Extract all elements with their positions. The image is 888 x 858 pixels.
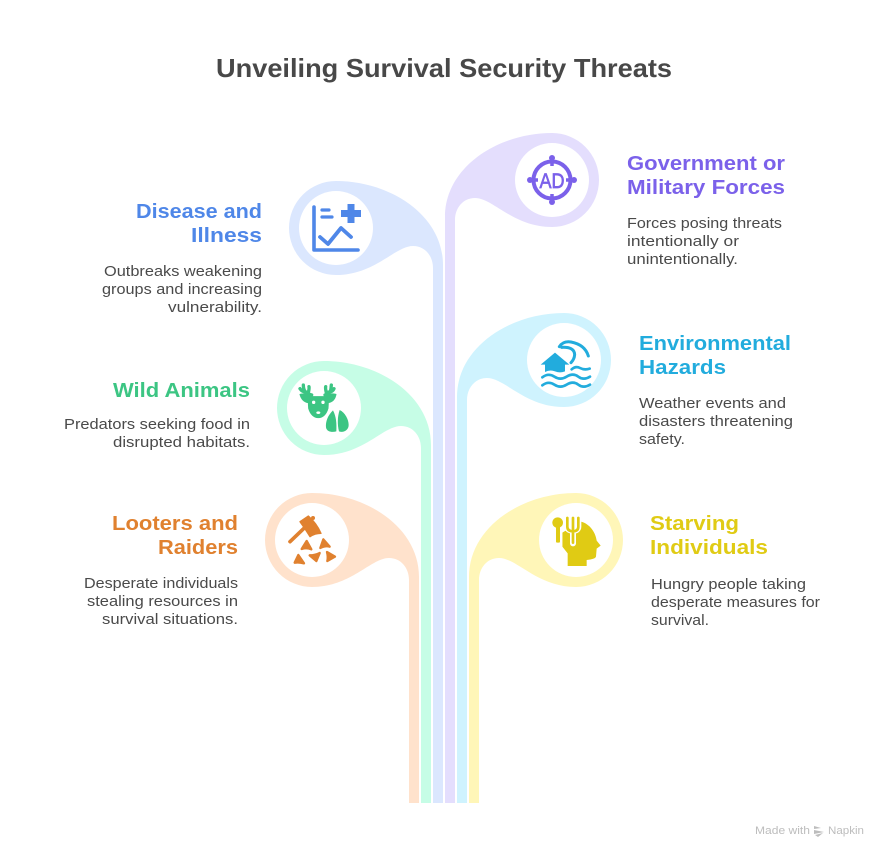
panel: looters and raiders stem: [265, 493, 419, 803]
text block: government or military forces: Forces posing threats: [627, 216, 782, 232]
text block: environmental hazards: Hazards: [639, 357, 726, 379]
text block: disease and illness: Illness: [191, 225, 262, 247]
attribution: made with napkin: [755, 825, 864, 837]
text block: looters and raiders: Desperate individuals: [84, 576, 238, 592]
text block: government or military forces: Government or: [627, 153, 785, 175]
text block: environmental hazards: disasters threatening: [639, 414, 793, 430]
text block: starving individuals: Starving: [650, 513, 739, 535]
text block: wild animals: [64, 380, 250, 451]
panel: disease and illness stem: [289, 181, 443, 803]
text block: disease and illness: Outbreaks weakening: [104, 264, 262, 280]
icon: head with spoon and fork: [552, 517, 601, 566]
panel: wild animals stem: [277, 361, 431, 803]
icon: target with AD: [527, 155, 577, 205]
text block: environmental hazards: safety.: [639, 432, 685, 448]
text block: environmental hazards: Environmental: [639, 333, 791, 355]
text block: disease and illness: vulnerability.: [168, 300, 262, 316]
panel: government or military stem: [445, 133, 599, 803]
text block: starving individuals: Individuals: [650, 537, 768, 559]
text block: government or military forces: intentionally or: [627, 234, 739, 250]
text block: government or military forces: unintentionally.: [627, 252, 738, 268]
icon: deer head and hoofprint: [300, 385, 349, 432]
text block: starving individuals: desperate measures for: [651, 595, 820, 611]
attribution: made with napkin: Made with: [755, 825, 810, 837]
text block: wild animals: disrupted habitats.: [113, 435, 250, 451]
text block: disease and illness: Disease and: [136, 201, 262, 223]
icon: chart with medical plus: [314, 204, 361, 250]
text block: disease and illness: groups and increasing: [102, 282, 262, 298]
panel: starving individuals stem: [469, 493, 623, 803]
icon: target with AD: AD: [540, 170, 564, 193]
text block: environmental hazards: Weather events and: [639, 396, 786, 412]
text block: starving individuals: [650, 513, 820, 629]
attribution: made with napkin: Napkin: [828, 825, 864, 837]
text block: wild animals: Predators seeking food in: [64, 417, 250, 433]
text block: disease and illness: [102, 201, 262, 316]
text block: looters and raiders: Raiders: [158, 537, 238, 559]
text block: looters and raiders: stealing resources in: [87, 594, 238, 610]
icon: axe and wood chips: [290, 516, 335, 563]
text block: starving individuals: survival.: [651, 613, 709, 629]
text block: environmental hazards: [639, 333, 793, 448]
text block: looters and raiders: Looters and: [112, 513, 238, 535]
text block: government or military forces: Military Forces: [627, 177, 785, 199]
text block: looters and raiders: survival situations.: [102, 612, 238, 628]
title: Unveiling Survival Security Threats: [216, 53, 672, 83]
text block: looters and raiders: [84, 513, 238, 628]
text block: government or military forces: [627, 153, 785, 268]
icon: flooded house and wave: [541, 342, 590, 387]
text block: wild animals: Wild Animals: [113, 380, 250, 402]
panel: environmental hazards stem: [457, 313, 611, 803]
text block: starving individuals: Hungry people taking: [651, 577, 806, 593]
